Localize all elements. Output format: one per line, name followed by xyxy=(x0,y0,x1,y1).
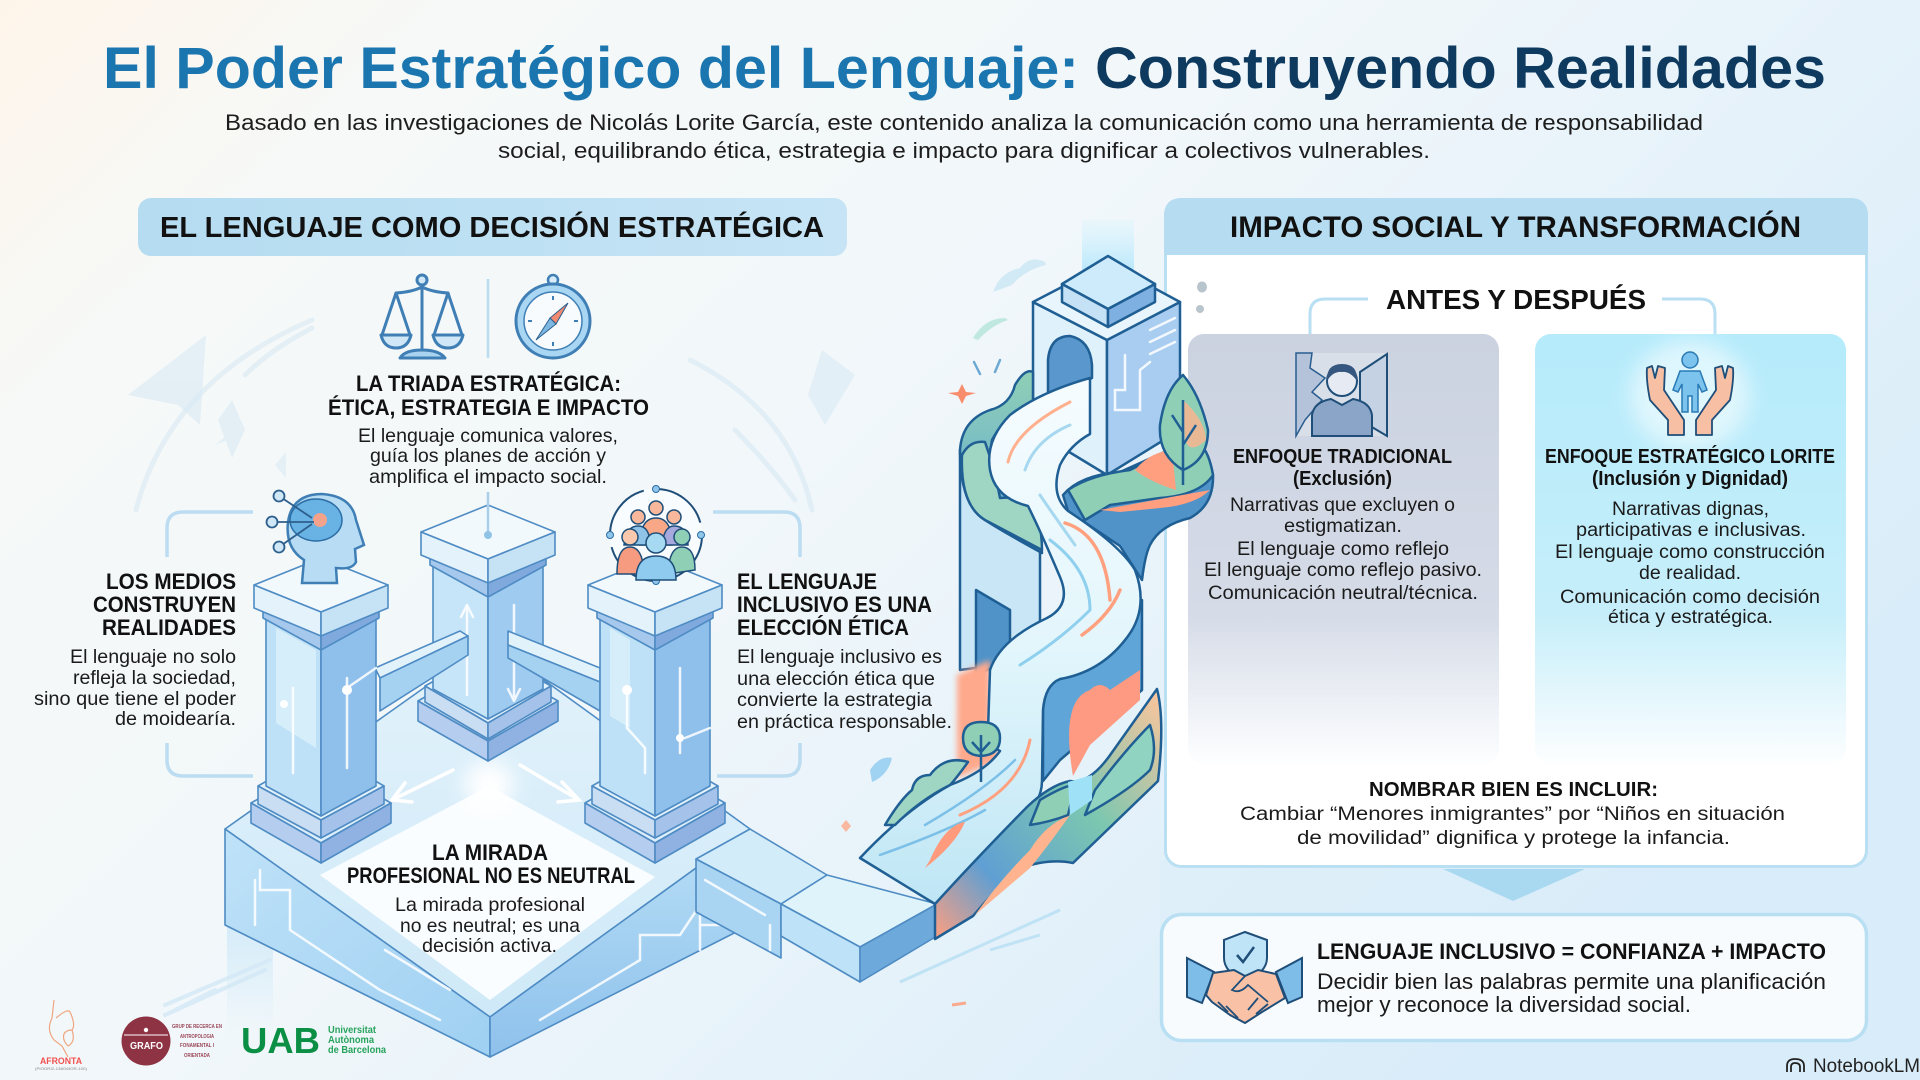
text: enfoque tradicional: Narrativas que excluyen o xyxy=(1230,495,1455,516)
river streaks xyxy=(880,402,1120,855)
heading: enfoque estratégico: (Inclusión y Dignidad) xyxy=(1592,468,1788,490)
text: la mirada profesional xyxy=(347,840,635,957)
text: los medios construyen realidades: refleja la sociedad, xyxy=(73,667,236,689)
icon: shield and handshake xyxy=(1187,932,1302,1023)
text: el lenguaje inclusivo: ELECCIÓN ÉTICA xyxy=(737,615,909,640)
river xyxy=(860,378,1141,904)
text: el lenguaje inclusivo: EL LENGUAJE xyxy=(737,569,877,594)
subtitle: Basado en las investigaciones de Nicolás Lorite García, este contenido analiza la comunicación como una herramienta de responsabilidad xyxy=(225,110,1703,135)
brand: notebooklm: NotebookLM xyxy=(1813,1056,1920,1077)
text: los medios construyen realidades: sino que tiene el poder xyxy=(34,688,237,710)
tree right xyxy=(1160,375,1208,485)
text: la triada estratégica: ÉTICA, ESTRATEGIA E IMPACTO xyxy=(328,395,649,420)
icon: head with brain network xyxy=(266,490,364,583)
tower column of light xyxy=(1082,220,1134,288)
logo: grafo: ORIENTADA xyxy=(184,1053,210,1059)
text: enfoque tradicional: Comunicación neutral/técnica. xyxy=(1208,583,1478,604)
floor arrows xyxy=(392,765,579,802)
logo: grafo: GRUP DE RECERCA EN xyxy=(172,1024,222,1030)
text: lenguaje inclusivo: LENGUAJE INCLUSIVO = CONFIANZA + IMPACTO xyxy=(1317,939,1826,964)
logo: uab: Autònoma xyxy=(328,1035,374,1046)
icon: hands holding child xyxy=(1647,352,1733,435)
text: la triada estratégica: LA TRIADA ESTRATÉGICA: xyxy=(356,371,621,396)
icon: people circle xyxy=(606,486,704,584)
tower xyxy=(1033,256,1180,475)
connector: antes y después xyxy=(1310,299,1715,334)
logo: grafo xyxy=(122,1016,222,1066)
logo: uab: de Barcelona xyxy=(328,1045,386,1056)
title xyxy=(103,36,1826,101)
text: la mirada profesional: La mirada profesional xyxy=(395,894,585,916)
text: los medios construyen realidades: LOS MEDIOS xyxy=(106,569,236,594)
bush lower xyxy=(885,760,968,825)
text: nombrar bien es incluir: NOMBRAR BIEN ES INCLUIR: xyxy=(1369,779,1658,801)
green bush upper xyxy=(960,371,1042,553)
text: enfoque estratégico: participativas e inclusivas. xyxy=(1576,520,1806,541)
arrow: down to conclusion xyxy=(1443,869,1585,901)
logo: afronta: (PIODRI2-138G6IOR-100) xyxy=(35,1066,88,1071)
text: el lenguaje inclusivo: una elección ética que xyxy=(737,668,935,690)
title: El Poder Estratégico del Lenguaje: xyxy=(103,36,1079,101)
text: el lenguaje inclusivo: convierte la estrategia xyxy=(737,689,932,711)
dots near panel xyxy=(1196,282,1207,313)
logo: uab xyxy=(241,1020,386,1061)
heading: enfoque estratégico: ENFOQUE ESTRATÉGICO LORITE xyxy=(1545,445,1835,468)
logo: grafo: GRAFO xyxy=(130,1041,163,1052)
logo: uab: UAB xyxy=(241,1020,320,1061)
text: el lenguaje inclusivo: en práctica responsable. xyxy=(737,711,952,733)
text: los medios construyen realidades xyxy=(34,569,237,730)
text: lenguaje inclusivo: mejor y reconoce la diversidad social. xyxy=(1317,992,1691,1017)
left wall xyxy=(960,450,1040,670)
logo: afronta: AFRONTA xyxy=(40,1056,82,1067)
heading: enfoque tradicional: ENFOQUE TRADICIONAL xyxy=(1233,446,1452,468)
text: enfoque estratégico: de realidad. xyxy=(1639,563,1741,584)
text: el lenguaje inclusivo xyxy=(737,569,952,733)
heading: el lenguaje como decisión estratégica: EL LENGUAJE COMO DECISIÓN ESTRATÉGICA xyxy=(160,210,824,244)
heading: enfoque tradicional: (Exclusión) xyxy=(1293,468,1392,490)
text: la mirada profesional: decisión activa. xyxy=(422,935,557,957)
panel: lenguaje inclusivo conclusion xyxy=(1162,914,1866,1040)
pillar: right xyxy=(585,558,725,863)
icon: excluded person xyxy=(1296,353,1388,436)
pillar: center xyxy=(418,505,558,761)
logo: uab: Universitat xyxy=(328,1025,377,1036)
text: la triada estratégica xyxy=(328,371,649,488)
text: el lenguaje inclusivo: INCLUSIVO ES UNA xyxy=(737,592,932,617)
text: enfoque estratégico xyxy=(1555,499,1825,628)
text: la triada estratégica: El lenguaje comunica valores, xyxy=(358,425,618,447)
brackets: side labels xyxy=(167,512,800,776)
text: enfoque tradicional: estigmatizan. xyxy=(1284,516,1402,537)
text: enfoque estratégico: Comunicación como decisión xyxy=(1560,587,1820,608)
title: Construyendo Realidades xyxy=(1095,36,1826,101)
text: los medios construyen realidades: El lenguaje no solo xyxy=(70,646,236,668)
heading: impacto social: IMPACTO SOCIAL Y TRANSFORMACIÓN xyxy=(1230,210,1801,244)
text: el lenguaje inclusivo: El lenguaje inclusivo es xyxy=(737,646,942,668)
river bottom ribbons xyxy=(935,689,1161,939)
text: lenguaje inclusivo xyxy=(1317,939,1826,1017)
floor glow xyxy=(465,761,513,809)
text: la triada estratégica: amplifica el impacto social. xyxy=(369,466,607,488)
text: la mirada profesional: LA MIRADA xyxy=(432,840,548,865)
text: nombrar bien es incluir: Cambiar “Menores inmigrantes” por “Niños en situación xyxy=(1240,804,1785,825)
text: enfoque tradicional xyxy=(1204,495,1482,604)
text: lenguaje inclusivo: Decidir bien las palabras permite una planificación xyxy=(1317,969,1826,994)
logo: grafo: FONAMENTAL I xyxy=(180,1043,214,1049)
subtitle xyxy=(225,110,1703,163)
text: enfoque tradicional: El lenguaje como reflejo pasivo. xyxy=(1204,560,1482,581)
connector line to triad xyxy=(487,492,489,535)
text: enfoque estratégico: El lenguaje como construcción xyxy=(1555,542,1825,563)
card: enfoque estratégico lorite xyxy=(1535,334,1846,764)
logo: afronta xyxy=(35,1000,88,1071)
glow column below platform xyxy=(227,920,273,1030)
heading: antes y después: ANTES Y DESPUÉS xyxy=(1386,284,1646,315)
heading: el lenguaje como decisión estratégica xyxy=(138,198,847,256)
text: la mirada profesional: no es neutral; es una xyxy=(400,915,580,937)
track blocks to river xyxy=(696,829,937,982)
pillar: left xyxy=(251,558,391,863)
heading: enfoque estratégico xyxy=(1545,445,1835,490)
text: la mirada profesional: PROFESIONAL NO ES NEUTRAL xyxy=(347,863,635,888)
orange shapes xyxy=(957,660,1000,778)
text: nombrar bien es incluir: de movilidad” dignifica y protege la infancia. xyxy=(1297,828,1730,849)
text: enfoque estratégico: Narrativas dignas, xyxy=(1612,499,1769,520)
right bowl xyxy=(1063,441,1213,580)
card: enfoque tradicional xyxy=(1188,334,1499,764)
panel: impacto social y transformación xyxy=(1164,198,1868,866)
text: los medios construyen realidades: de moidearía. xyxy=(115,708,236,730)
decorations: clouds and sparkles xyxy=(841,260,1060,1005)
text: nombrar bien es incluir xyxy=(1240,779,1785,849)
platform: floor xyxy=(225,641,750,1057)
divider xyxy=(487,279,489,358)
heading: enfoque tradicional xyxy=(1233,446,1452,490)
illustration: isometric pillars platform xyxy=(165,492,937,1057)
illustration: river tower xyxy=(841,220,1213,1005)
text: la triada estratégica: guía los planes de acción y xyxy=(370,445,606,467)
icon: compass xyxy=(516,275,590,358)
icon: scales xyxy=(381,275,463,358)
text: los medios construyen realidades: REALIDADES xyxy=(102,615,236,640)
text: enfoque tradicional: El lenguaje como reflejo xyxy=(1237,539,1449,560)
logo: grafo: ANTROPOLOGIA xyxy=(180,1034,214,1040)
beams xyxy=(375,631,600,711)
text: enfoque estratégico: ética y estratégica. xyxy=(1608,607,1773,628)
text: los medios construyen realidades: CONSTRUYEN xyxy=(93,592,236,617)
subtitle: social, equilibrando ética, estrategia e impacto para dignificar a colectivos vulnerables. xyxy=(498,138,1430,163)
tree small xyxy=(963,722,1000,782)
